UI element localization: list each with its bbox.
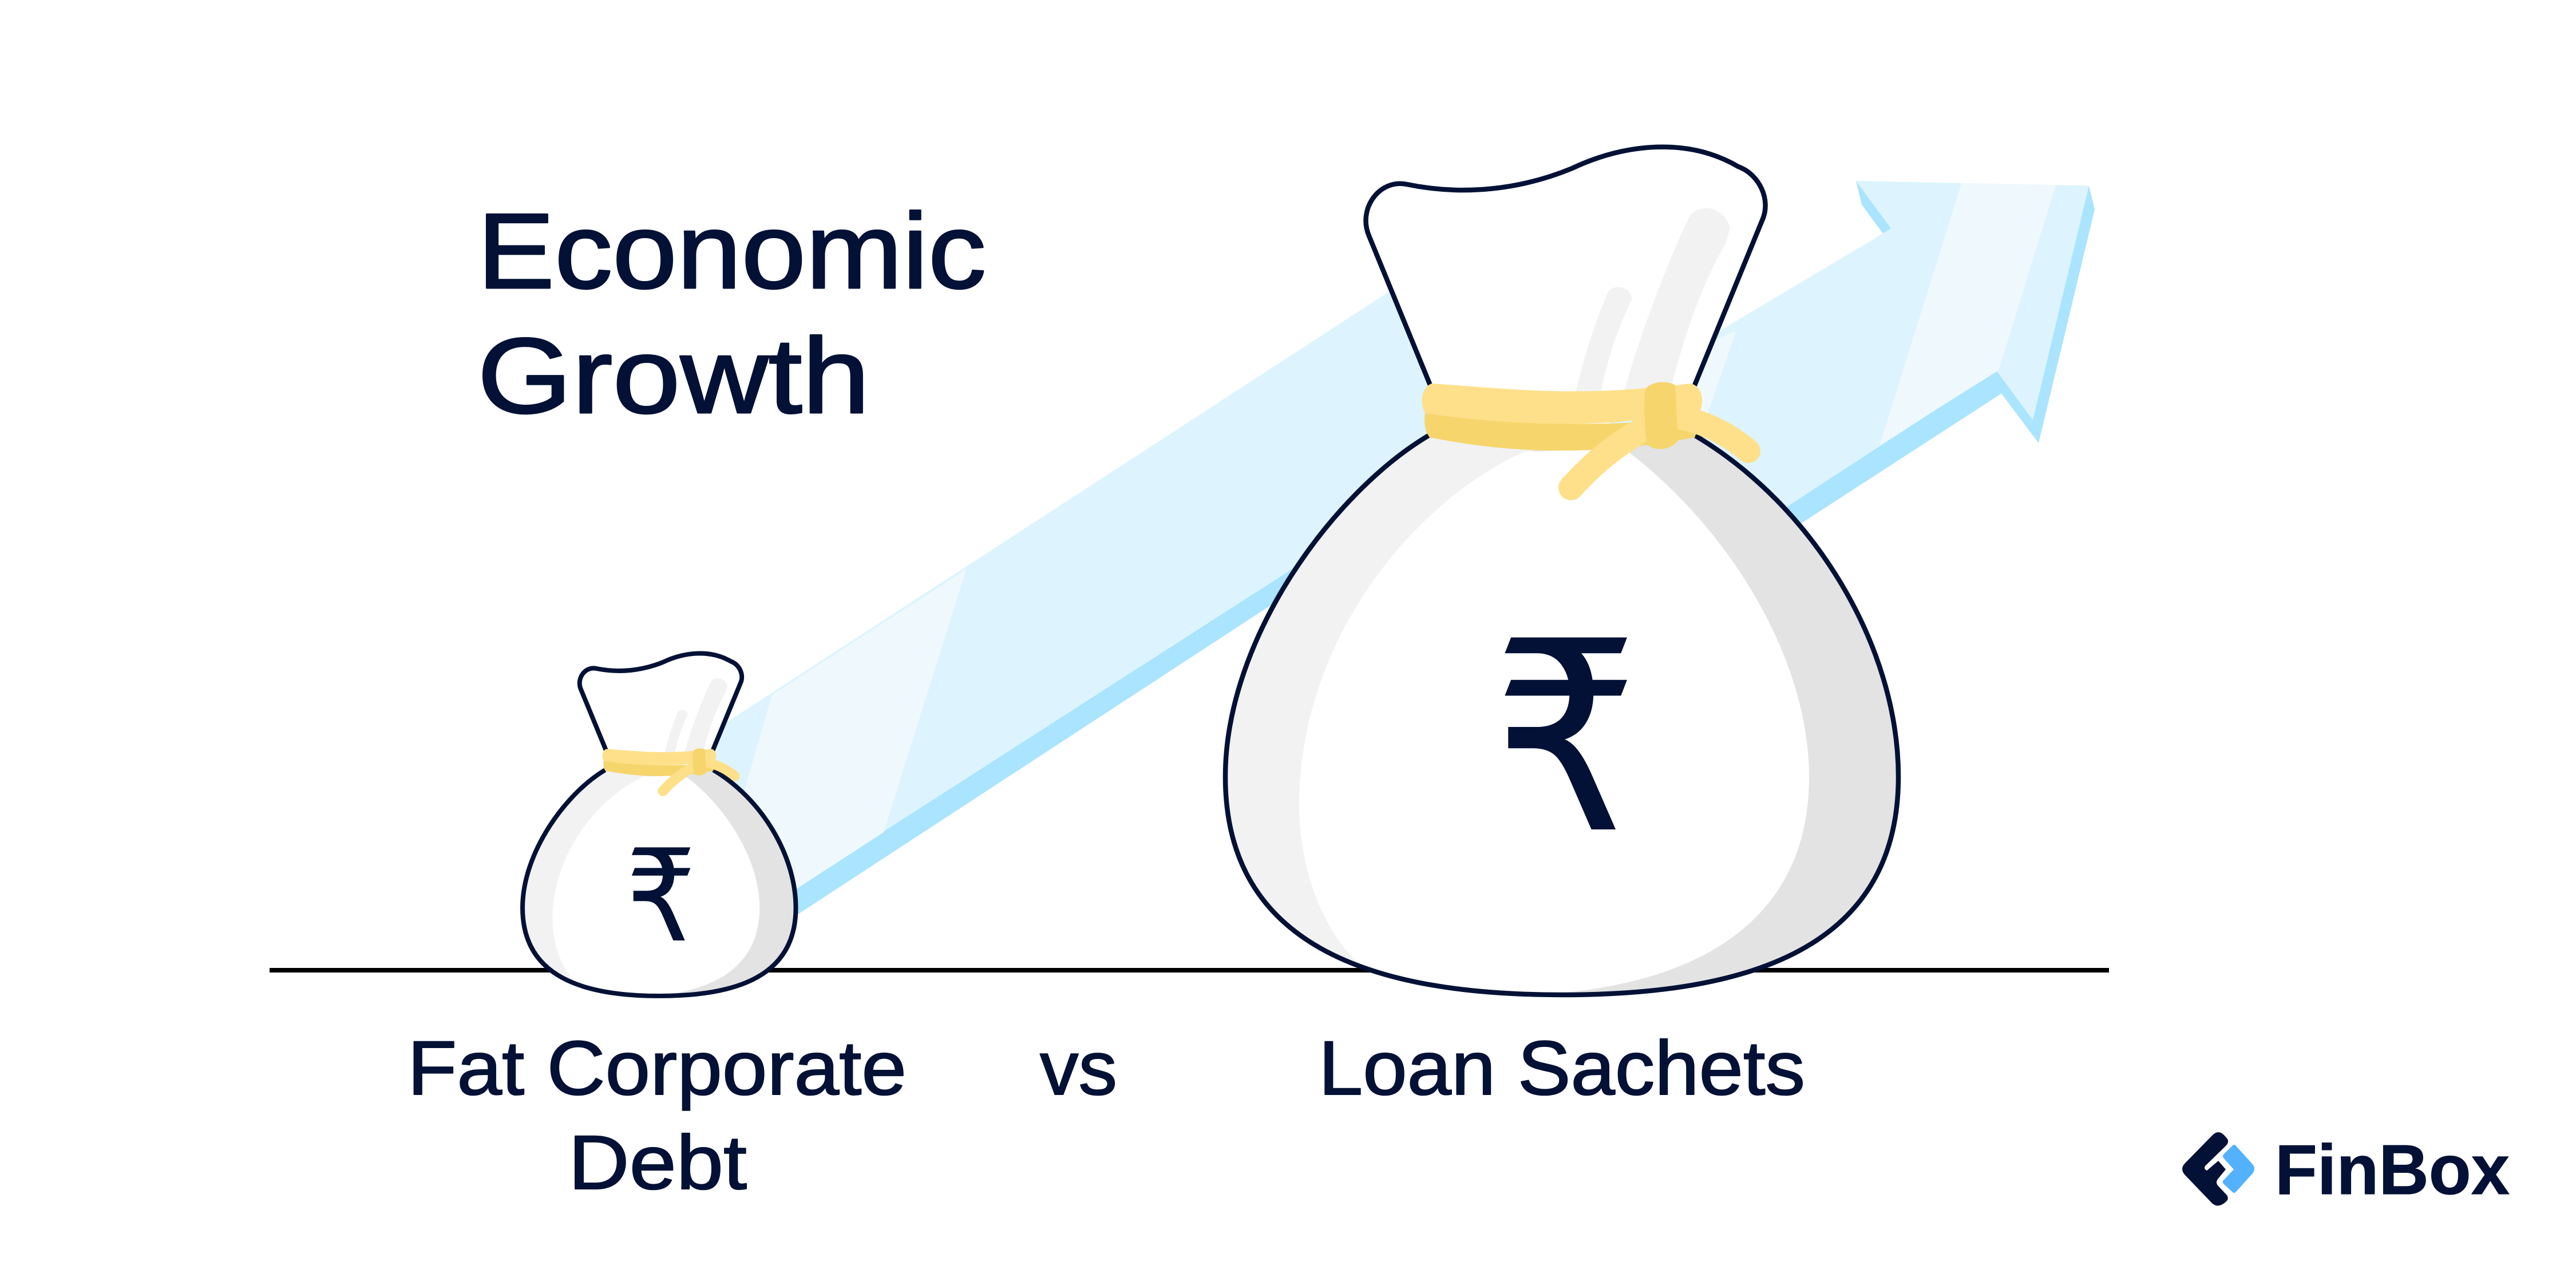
logo: FinBox xyxy=(2182,1131,2510,1209)
label: fat corporate debt: Fat Corporate xyxy=(407,1026,907,1111)
logo wordmark: FinBox xyxy=(2275,1131,2510,1209)
rupee symbol: large bag: ₹ xyxy=(1493,585,1639,892)
label: fat corporate debt: Debt xyxy=(568,1120,747,1205)
label: vs: vs xyxy=(1040,1026,1117,1111)
icon: large money bag xyxy=(1222,144,1901,997)
title: Growth xyxy=(477,316,870,436)
bag neck xyxy=(580,654,742,754)
bag neck xyxy=(1366,147,1766,395)
tie xyxy=(603,749,735,791)
arrow: rising growth arrow xyxy=(710,181,2095,972)
tie xyxy=(1422,382,1748,488)
bag highlights xyxy=(664,678,727,754)
title xyxy=(477,191,986,436)
bag body xyxy=(525,770,793,994)
label: fat corporate debt xyxy=(407,1026,907,1205)
logo icon xyxy=(2182,1132,2254,1205)
bag highlights xyxy=(1575,208,1730,395)
title: Economic xyxy=(477,191,986,311)
ground line xyxy=(270,968,2109,973)
label: loan sachets: Loan Sachets xyxy=(1319,1026,1805,1111)
icon: small money bag xyxy=(520,651,798,998)
rupee symbol: small bag: ₹ xyxy=(626,823,696,971)
bag body xyxy=(1228,437,1896,993)
